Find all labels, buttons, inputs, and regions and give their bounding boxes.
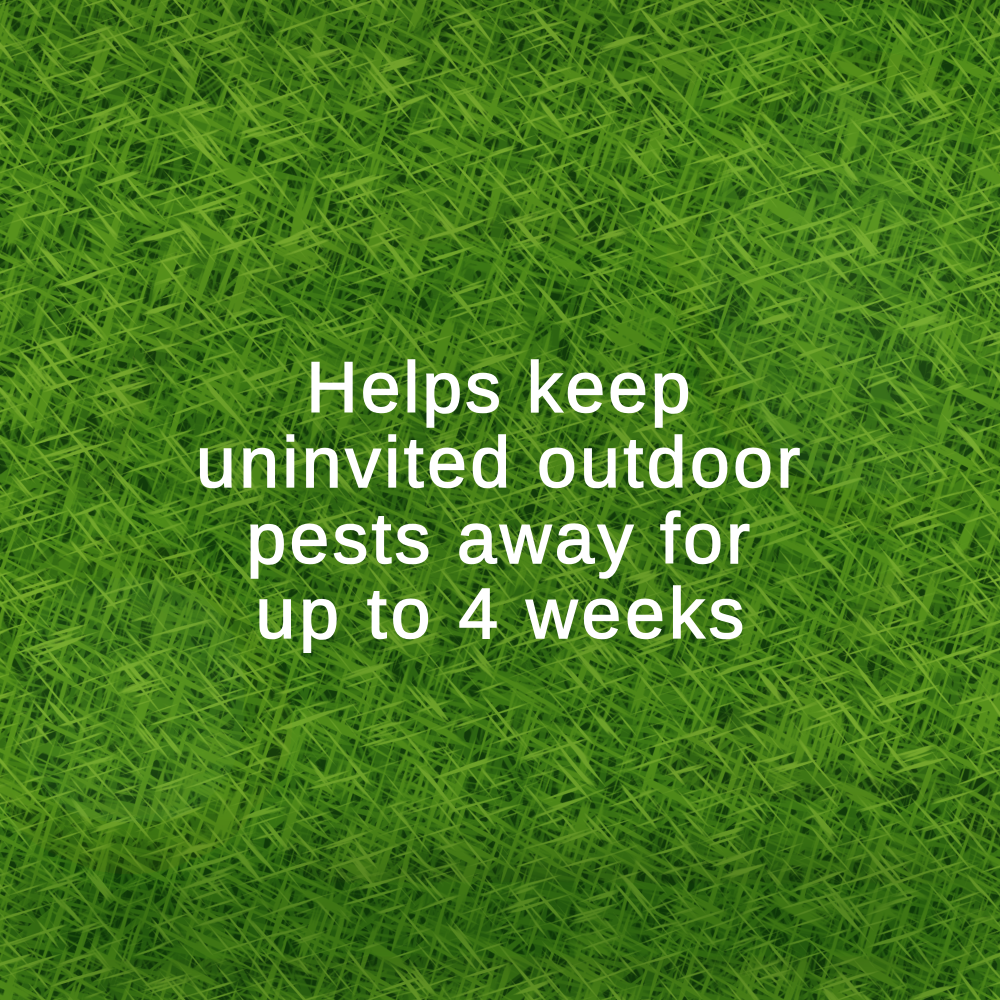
headline text: up to 4 weeks <box>256 575 748 653</box>
headline text: pests away for <box>247 500 753 579</box>
headline text: Helps keep <box>306 351 694 428</box>
headline text: uninvited outdoor <box>196 424 804 503</box>
headline text <box>196 351 804 653</box>
